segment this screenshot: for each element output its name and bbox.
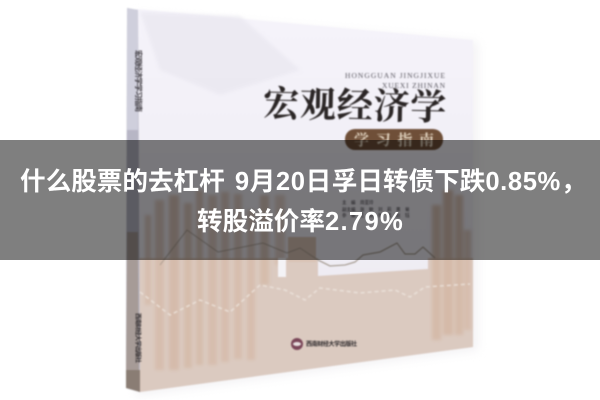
white window strip [278,258,286,277]
dark trend line left [160,230,318,265]
headline: 什么股票的去杠杆 9月20日孚日转债下跌0.85%， [20,168,587,196]
spine title: 宏观经济学学习指南 [134,50,144,112]
tan lower cover [138,258,473,392]
dark trend line right [318,243,435,266]
book front cover [137,9,473,392]
spine publisher: 西南财经大学出版社 [134,313,142,363]
editor credits: 副主编 张 敏 刘 莉 黄 菊 [342,206,410,213]
publisher logo [291,338,357,350]
pinyin title: HONGGUAN JINGJIXUE [345,71,445,80]
editor credits: 参 编 王 丽 陈 晨 赵 钰 [342,212,410,219]
pinyin title [345,71,446,90]
main book title: 宏观经济学 [263,84,447,128]
skyline columns [145,190,471,370]
editor credits: 主 编 周亚玲 [342,199,374,206]
publisher logo: 西南财经大学出版社 [306,340,357,348]
book spine [126,8,140,392]
headline: 转股溢价率2.79% [197,208,404,236]
pinyin title: XUEXI ZHINAN [382,81,446,90]
dark translucent title band [0,140,600,260]
subtitle badge: 学习指南 [354,131,434,149]
book soft shadow [136,14,478,396]
editor credits [342,199,410,219]
headline [20,168,587,236]
light trend line [140,284,470,315]
subtitle badge [345,129,443,150]
